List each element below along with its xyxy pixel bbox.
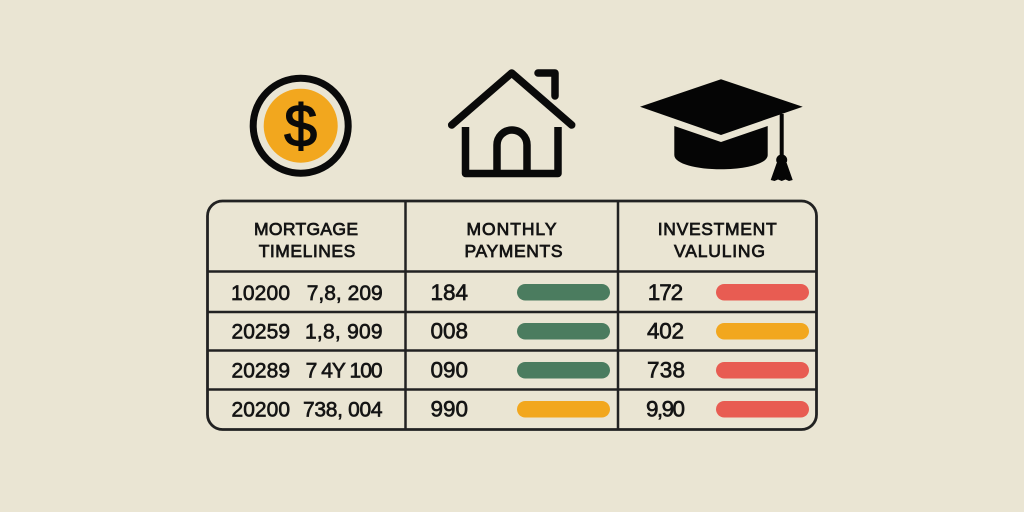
column heading: monthly payments: PAYMENTS (464, 241, 562, 261)
column heading: investment valuling: VALULING (674, 241, 765, 261)
row 1: 7,8, 209 (307, 282, 383, 305)
row 2: 20259 (232, 321, 290, 344)
column heading: monthly payments: MONTHLY (466, 219, 557, 239)
column heading: mortgage timelines: MORTGAGE (254, 219, 358, 239)
column heading: investment valuling: INVESTMENT (658, 219, 777, 239)
row 3: 738 (647, 358, 685, 383)
row 3: 20289 (232, 360, 290, 383)
icon: house (452, 73, 572, 174)
icon: dollar coin: $ (284, 93, 317, 159)
row 4: 738, 004 (303, 399, 383, 422)
row 3: 7 4Y 100 (306, 360, 383, 383)
column heading: mortgage timelines: TIMELINES (259, 241, 355, 261)
column heading: monthly payments (464, 219, 562, 261)
row 2: 1,8, 909 (305, 321, 383, 344)
row 1: 184 (430, 280, 468, 305)
icon: graduation cap (640, 79, 803, 181)
table grid (208, 201, 816, 430)
row 2: 008 (430, 319, 468, 344)
icon: dollar coin (253, 78, 348, 173)
row 4: 20200 (232, 399, 290, 422)
row 2: 402 (647, 319, 684, 344)
row 1 (231, 280, 809, 305)
row 1: 10200 (231, 282, 290, 305)
row 4 (232, 397, 809, 422)
row 3: 090 (430, 358, 468, 383)
table (208, 201, 816, 430)
row 2 (232, 319, 809, 344)
row 4: 990 (430, 397, 468, 422)
column heading: investment valuling (658, 219, 777, 261)
row 1: 172 (648, 280, 683, 305)
column heading: mortgage timelines (254, 219, 358, 261)
row 3 (232, 358, 809, 383)
row 4: 9,90 (646, 397, 685, 422)
